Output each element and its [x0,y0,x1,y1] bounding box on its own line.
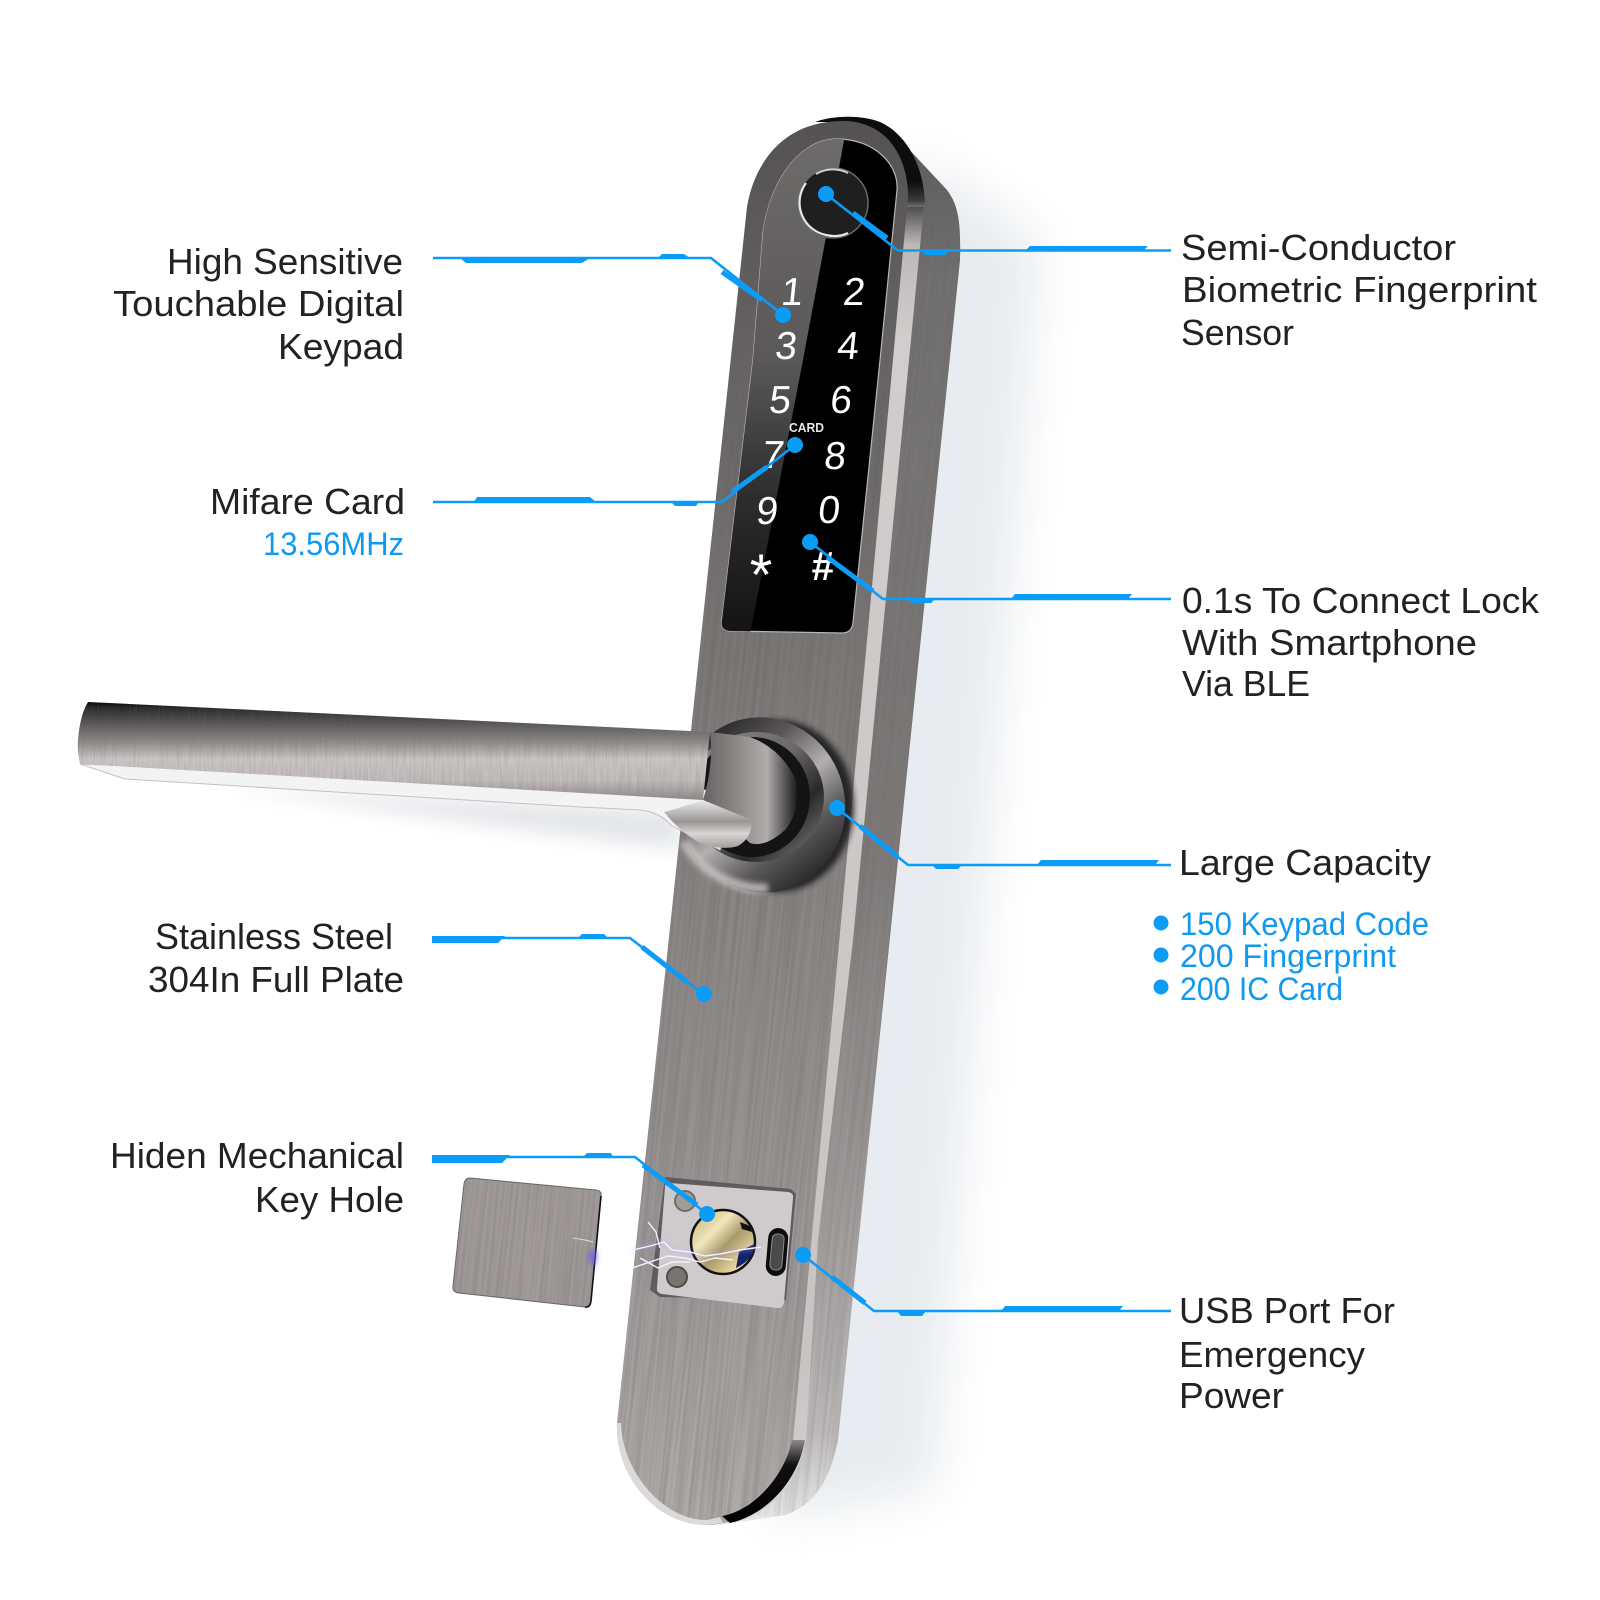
label: mifare card [210,481,405,562]
label: fingerprint sensor: Biometric Fingerprint [1182,269,1537,310]
handle bar [78,702,710,800]
callout: mifare card line [433,437,803,506]
top black rim [815,117,925,207]
callout: keypad line [433,254,791,323]
callout: fingerprint line [818,186,1171,255]
label: key hole: Hiden Mechanical [110,1135,404,1176]
rosette outer ring [659,699,865,911]
keypad digits: 2 [841,271,867,314]
keypad digits: 0 [816,489,842,532]
label: USB port: USB Port For [1179,1290,1395,1331]
label: keypad: Touchable Digital [113,283,404,324]
screw bottom [667,1267,687,1287]
chrome edge strip [720,205,924,1522]
callout: BLE line [802,534,1171,603]
keypad digits [750,271,867,608]
recess [650,1177,796,1300]
label: key hole: Key Hole [255,1179,404,1220]
label: keypad [113,241,404,367]
keypad digits: 1 [779,271,805,314]
rosette dark core [694,737,810,857]
magnetic cover piece [452,1178,602,1308]
label: USB port: Power [1179,1375,1284,1416]
key hole and USB module [632,1177,796,1308]
label: BLE: With Smartphone [1182,622,1477,663]
lock plate [616,116,960,1525]
mechanical key cylinder [691,1210,755,1274]
keypad digits: 8 [822,435,848,478]
bottom silver rim [617,1423,723,1525]
brushed texture [620,509,877,1525]
rosette shadow [702,720,854,892]
rosette inner ring [688,732,824,862]
label: fingerprint sensor: Sensor [1181,312,1294,353]
label: BLE: 0.1s To Connect Lock [1182,580,1540,621]
label: fingerprint sensor: Semi-Conductor [1181,227,1456,268]
label: fingerprint sensor [1181,227,1537,353]
label: USB port: Emergency [1179,1334,1365,1375]
label: large capacity: Large Capacity [1179,842,1431,883]
keypad digits: 5 [767,379,793,422]
keypad digits: 3 [773,325,799,368]
capacity list [1154,906,1429,1007]
label: keypad: High Sensitive [167,241,403,282]
callout: key hole line [432,1153,715,1222]
label: BLE: Via BLE [1182,663,1310,704]
callout: USB line [795,1247,1171,1316]
label: stainless steel [148,916,404,1000]
label: mifare card: 13.56MHz [263,526,404,562]
capacity list: 200 Fingerprint [1180,938,1396,974]
callout: capacity line [829,800,1171,869]
bottom black band [722,1440,805,1523]
door handle [78,702,858,896]
keypad digits: * [750,543,772,608]
label: BLE [1182,580,1540,704]
label: large capacity [1154,842,1431,1007]
keypad digits: # [812,543,835,589]
label: USB port [1179,1290,1395,1416]
USB port [765,1227,789,1277]
keypad digits: 9 [754,490,780,533]
capacity list: 150 Keypad Code [1180,906,1429,942]
label: keypad: Keypad [278,326,404,367]
label: stainless steel: Stainless Steel [155,916,393,957]
handle drop shadow [223,787,680,850]
plate side face [720,151,960,1525]
plate front face [617,121,908,1525]
capacity list: 200 IC Card [1180,971,1343,1007]
keypad digits: 6 [828,379,854,422]
label: mifare card: Mifare Card [210,481,405,522]
module plate [657,1183,793,1308]
label: key hole [110,1135,404,1220]
electric arcs [632,1222,761,1268]
keypad panel [721,138,898,634]
neck wedge [664,800,752,848]
rosette silver lip [684,842,768,888]
fingerprint sensor [798,168,868,238]
keypad digits: 7 [760,434,786,477]
lock body shadow [770,155,1040,1520]
label: stainless steel: 304In Full Plate [148,959,404,1000]
keypad digits: CARD [789,421,824,435]
glass reflection [722,139,844,632]
handle neck [703,732,797,844]
screw top [675,1191,695,1211]
handle underside [80,764,740,850]
callout: stainless steel line [432,934,712,1002]
keypad digits: 4 [835,325,861,368]
